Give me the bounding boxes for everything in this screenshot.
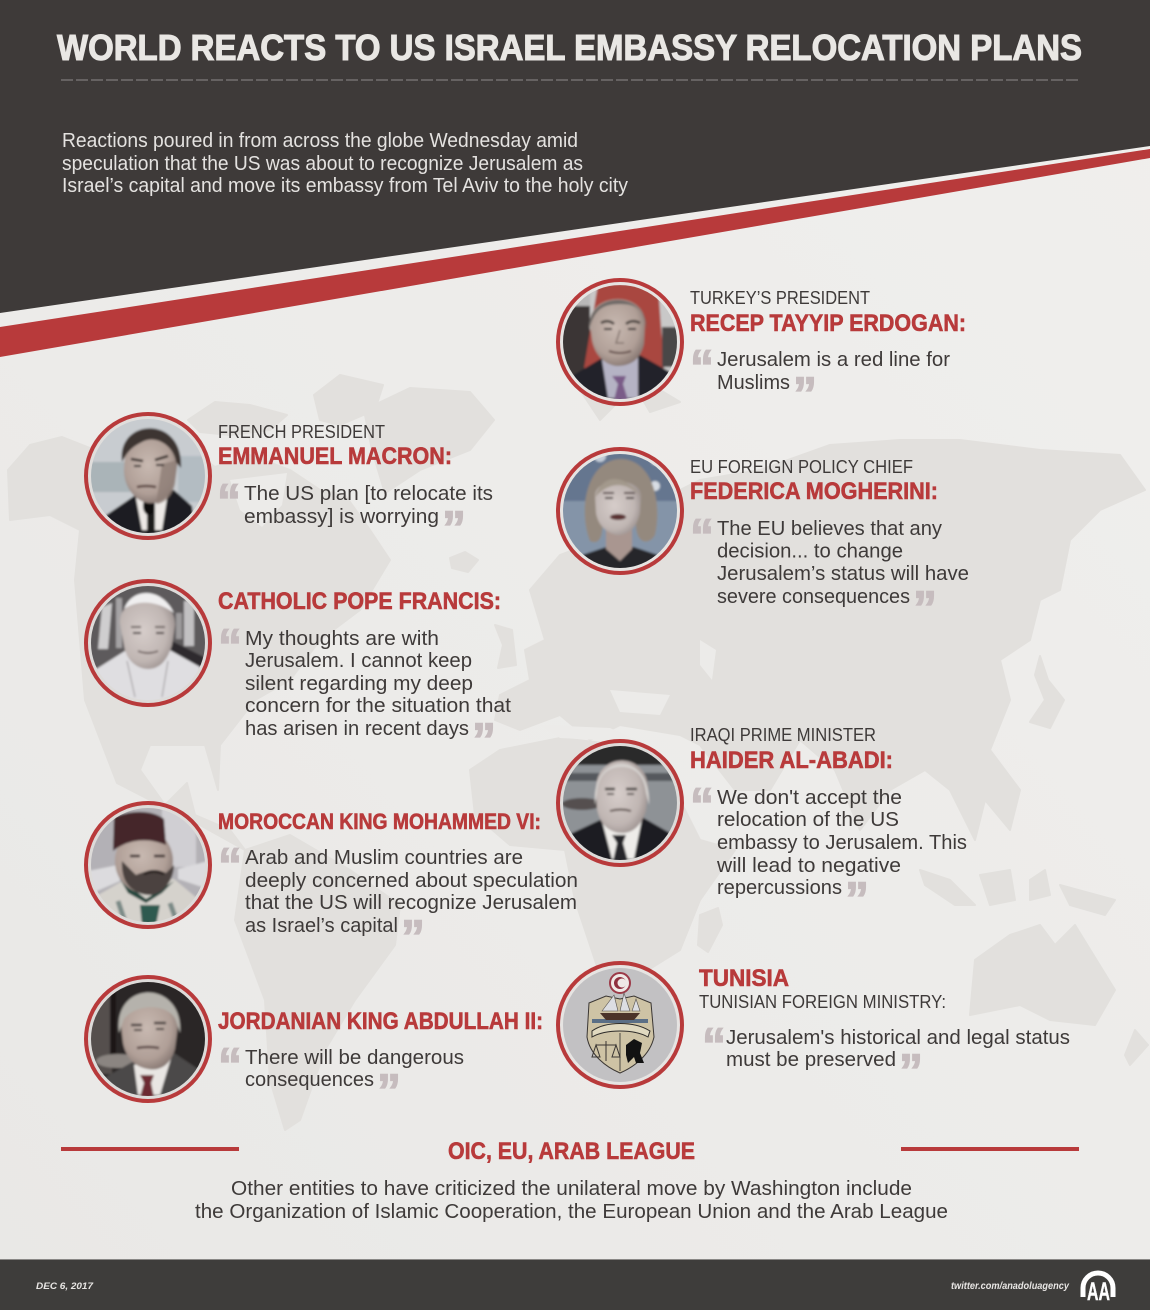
- quote: embassy] is worrying: [244, 505, 439, 528]
- quote: Jerusalem's historical and legal status: [726, 1026, 1070, 1049]
- title: WORLD REACTS TO US ISRAEL EMBASSY RELOCATION PLANS: [57, 27, 1082, 68]
- inland water on map: [230, 473, 716, 742]
- text block: the Organization of Islamic Cooperation, the European Union and the Arab League: [195, 1200, 948, 1223]
- quote: deeply concerned about speculation: [245, 869, 578, 892]
- quote: The EU believes that any: [717, 517, 943, 540]
- header band: [0, 0, 1150, 313]
- intro text: speculation that the US was about to recognize Jerusalem as: [62, 152, 583, 175]
- date: DEC 6, 2017: [36, 1281, 94, 1292]
- quote: embassy to Jerusalem. This: [717, 831, 967, 854]
- quote: Jerusalem is a red line for: [717, 348, 950, 371]
- icon: Anadolu Agency logo: [1083, 1273, 1113, 1306]
- portrait: Macron: [86, 414, 210, 538]
- quote: “: [690, 510, 714, 564]
- quote: ”: [913, 582, 937, 636]
- intro text: Israel’s capital and move its embassy from Tel Aviv to the holy city: [62, 174, 629, 197]
- heading: OIC, EU, ARAB LEAGUE: [448, 1138, 695, 1165]
- name: HAIDER AL-ABADI:: [690, 747, 893, 774]
- name: CATHOLIC POPE FRANCIS:: [218, 588, 501, 615]
- portrait: Erdogan: [558, 280, 682, 404]
- quote: Jerusalem. I cannot keep: [245, 649, 472, 672]
- quote: “: [690, 342, 714, 394]
- source: twitter.com/anadoluagency: [951, 1281, 1069, 1292]
- panel: Erdogan: [558, 280, 966, 422]
- quote: ”: [899, 1046, 923, 1098]
- panel: Abdullah II: [86, 977, 543, 1118]
- role: IRAQI PRIME MINISTER: [690, 724, 876, 745]
- red diagonal stripe: [0, 149, 1150, 357]
- text block: Other entities to have criticized the unilateral move by Washington include: [231, 1177, 912, 1200]
- name: MOROCCAN KING MOHAMMED VI:: [218, 809, 541, 834]
- quote: silent regarding my deep: [245, 672, 473, 695]
- panel: Mogherini: [556, 447, 968, 607]
- panel: Abadi: [556, 728, 966, 898]
- quote: “: [690, 780, 714, 832]
- quote: [218, 620, 511, 768]
- quote: ”: [401, 912, 425, 964]
- panel: OIC, EU, Arab League: [61, 1138, 1079, 1223]
- quote: relocation of the US: [717, 808, 899, 831]
- quote: “: [218, 1040, 242, 1092]
- quote: Muslims: [717, 371, 790, 394]
- portrait: Abadi: [558, 741, 682, 865]
- intro text: Reactions poured in from across the globe Wednesday amid: [62, 129, 578, 152]
- text block: [195, 1177, 948, 1223]
- quote: that the US will recognize Jerusalem: [245, 891, 577, 914]
- quote: [218, 1040, 464, 1118]
- portrait: Mogherini: [558, 449, 682, 573]
- role: EU FOREIGN POLICY CHIEF: [690, 456, 913, 477]
- quote: The US plan [to relocate its: [244, 482, 493, 505]
- quote: ”: [377, 1066, 401, 1118]
- panel: Mohammed VI: [84, 801, 577, 936]
- quote: has arisen in recent days: [245, 717, 469, 740]
- portrait: Mohammed VI: [86, 803, 210, 927]
- intro text: [62, 129, 629, 197]
- quote: as Israel’s capital: [245, 914, 398, 937]
- quote: concern for the situation that: [245, 694, 511, 717]
- name: RECEP TAYYIP ERDOGAN:: [690, 310, 966, 337]
- quote: We don't accept the: [717, 786, 902, 809]
- quote: decision... to change: [717, 540, 903, 562]
- quote: ”: [442, 502, 466, 556]
- quote: [690, 780, 967, 926]
- name: EMMANUEL MACRON:: [218, 443, 452, 470]
- quote: [690, 342, 950, 422]
- portrait: Pope Francis: [86, 581, 210, 705]
- name: FEDERICA MOGHERINI:: [690, 478, 938, 505]
- role: FRENCH PRESIDENT: [218, 421, 385, 442]
- role: TUNISIAN FOREIGN MINISTRY:: [699, 991, 946, 1012]
- quote: [702, 1020, 1070, 1098]
- quote: will lead to negative: [716, 854, 901, 877]
- quote: ”: [793, 368, 817, 422]
- panel: Pope Francis: [84, 579, 511, 739]
- panel: Tunisia: [558, 963, 1070, 1098]
- quote: severe consequences: [717, 585, 910, 608]
- quote: [218, 840, 578, 964]
- quote: Jerusalem’s status will have: [717, 562, 969, 585]
- name: TUNISIA: [699, 965, 789, 992]
- emblem: Tunisia coat of arms: [558, 963, 682, 1087]
- panel: Macron: [86, 414, 493, 556]
- icon: Anadolu Agency logo: AA: [1087, 1278, 1110, 1306]
- quote: must be preserved: [726, 1048, 896, 1071]
- footer: [0, 1259, 1150, 1310]
- world map: [8, 375, 1148, 1130]
- quote: “: [218, 840, 242, 892]
- name: JORDANIAN KING ABDULLAH II:: [218, 1008, 543, 1035]
- quote: My thoughts are with: [245, 627, 439, 650]
- portrait: Abdullah II: [86, 977, 210, 1101]
- quote: [217, 476, 493, 556]
- quote: “: [217, 476, 241, 528]
- quote: consequences: [245, 1068, 374, 1091]
- quote: “: [218, 620, 242, 674]
- quote: Arab and Muslim countries are: [245, 846, 523, 869]
- quote: There will be dangerous: [245, 1046, 464, 1069]
- quote: ”: [472, 714, 496, 768]
- quote: ”: [845, 874, 869, 926]
- quote: [690, 510, 969, 636]
- quote: “: [702, 1020, 726, 1072]
- quote: repercussions: [717, 876, 842, 899]
- role: TURKEY’S PRESIDENT: [690, 287, 870, 308]
